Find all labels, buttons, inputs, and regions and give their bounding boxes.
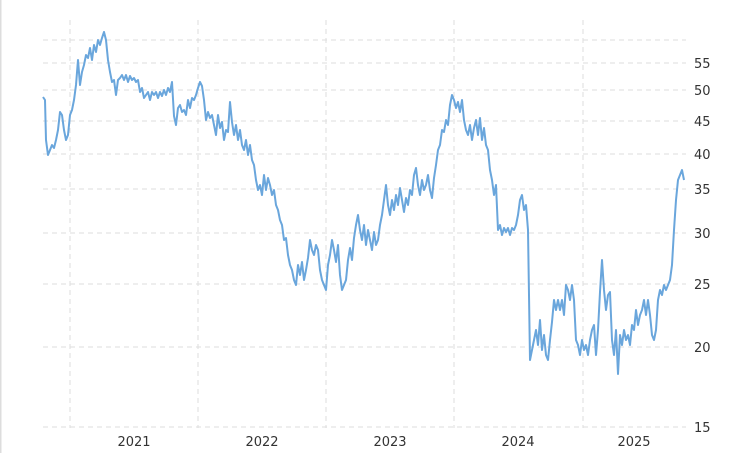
- x-axis labels: 2021: [117, 435, 151, 450]
- y-axis labels: 15: [694, 421, 711, 436]
- x-axis labels: 2023: [373, 435, 407, 450]
- y-axis labels: 25: [694, 278, 711, 293]
- y-axis labels: 35: [694, 183, 711, 198]
- x-axis labels: 2024: [501, 435, 535, 450]
- y-axis labels: 20: [694, 341, 711, 356]
- y-axis labels: 50: [694, 84, 711, 99]
- y-axis labels: 45: [694, 115, 711, 130]
- x-axis labels: 2025: [617, 435, 651, 450]
- y-axis labels: 55: [694, 57, 711, 72]
- x-axis labels: [117, 435, 651, 450]
- price line: [43, 32, 684, 374]
- y-axis labels: 30: [694, 227, 711, 242]
- x-axis labels: 2022: [245, 435, 279, 450]
- y-axis labels: 40: [694, 148, 711, 163]
- y-axis labels: [694, 57, 711, 436]
